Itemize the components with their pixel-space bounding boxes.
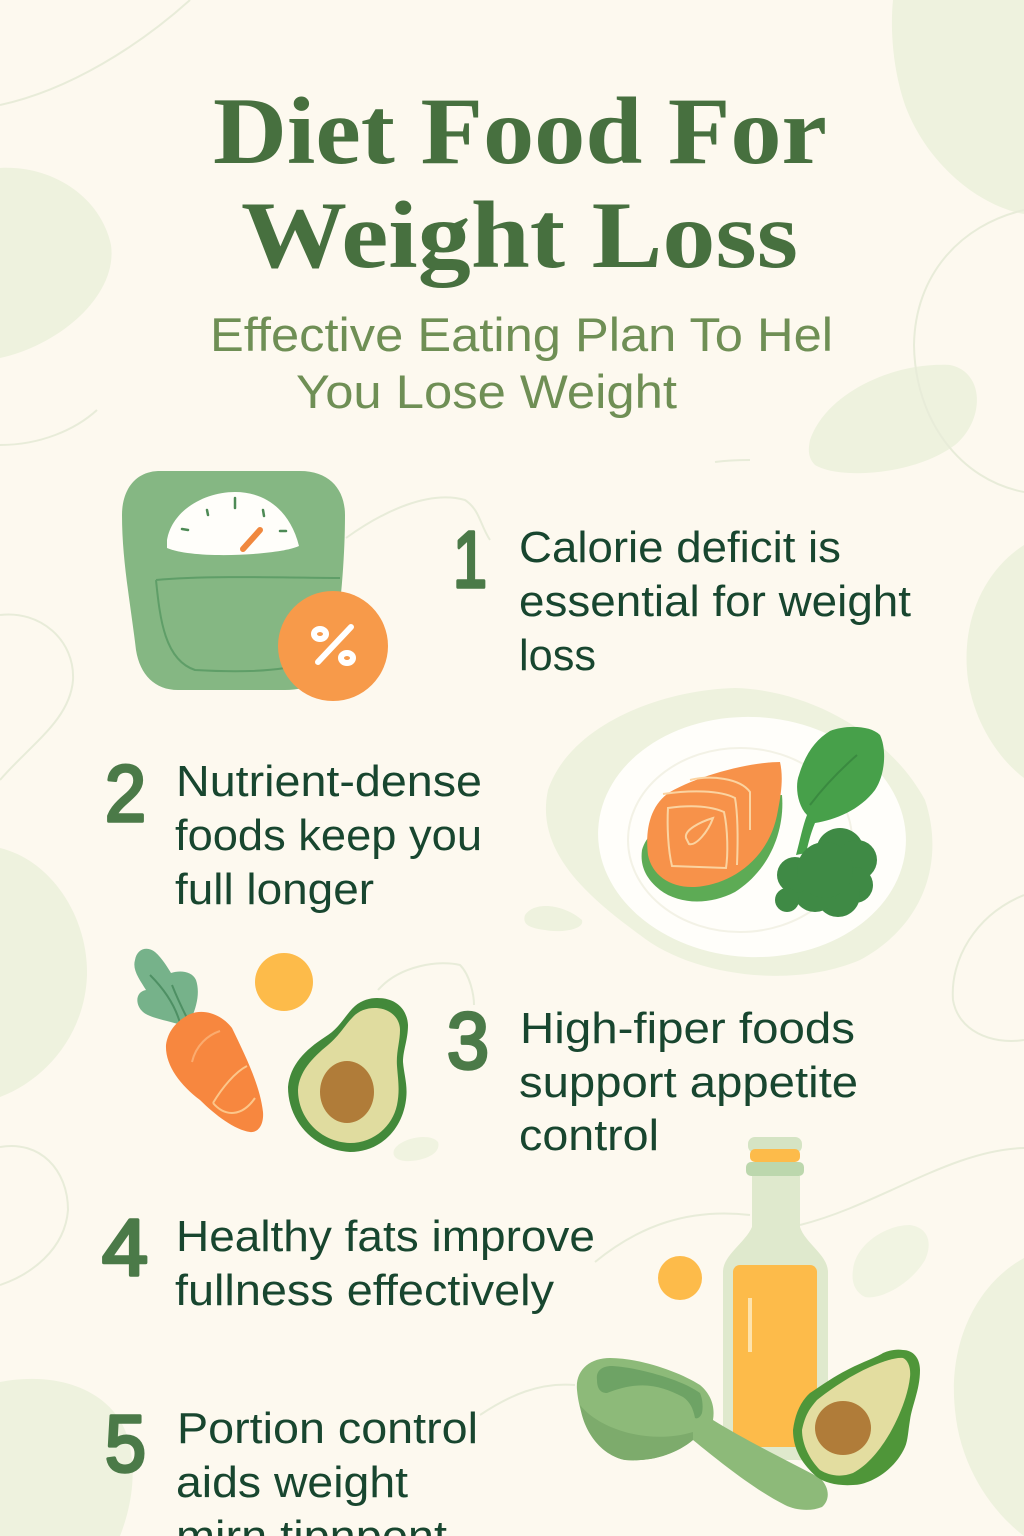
title: Diet Food For (213, 78, 827, 184)
item 4 text: fullness effectively (175, 1266, 554, 1315)
item 4 text (175, 1212, 595, 1315)
title (213, 78, 827, 288)
item 3 number: 3 (447, 996, 489, 1085)
subtitle: You Lose Weight (296, 365, 677, 418)
item 1 number: 1 (453, 515, 487, 604)
item 3 text: control (519, 1111, 659, 1160)
item 5 text (176, 1404, 478, 1536)
item 1 text: essential for weight (519, 577, 911, 626)
item 2 text (175, 757, 482, 914)
item 1 text (519, 523, 911, 680)
item 2 text: full longer (175, 865, 374, 914)
item 4 text: Healthy fats improve (176, 1212, 595, 1261)
icon: oil bottle, spoon and avocado (577, 1137, 920, 1510)
item 1 text: Calorie deficit is (519, 523, 841, 572)
item 2 text: foods keep you (175, 811, 482, 860)
subtitle (210, 308, 833, 418)
item 3 text: support appetite (519, 1058, 858, 1107)
icon: bathroom scale with percent badge (122, 471, 388, 701)
title: Weight Loss (241, 182, 798, 288)
item 2 text: Nutrient-dense (176, 757, 482, 806)
item 2 number: 2 (105, 749, 146, 838)
icon: plate with salmon and greens (592, 709, 912, 965)
subtitle: Effective Eating Plan To Hel (210, 308, 833, 361)
item 1 text: loss (519, 631, 596, 680)
item 5 text: Portion control (177, 1404, 478, 1453)
item 3 text: High-fiper foods (520, 1004, 855, 1053)
item 3 text (519, 1004, 858, 1160)
item 5 text: aids weight (176, 1458, 408, 1507)
icon: carrot, orange dot and avocado (134, 949, 408, 1152)
item 5 number: 5 (105, 1399, 146, 1488)
item 4 number: 4 (102, 1203, 148, 1292)
